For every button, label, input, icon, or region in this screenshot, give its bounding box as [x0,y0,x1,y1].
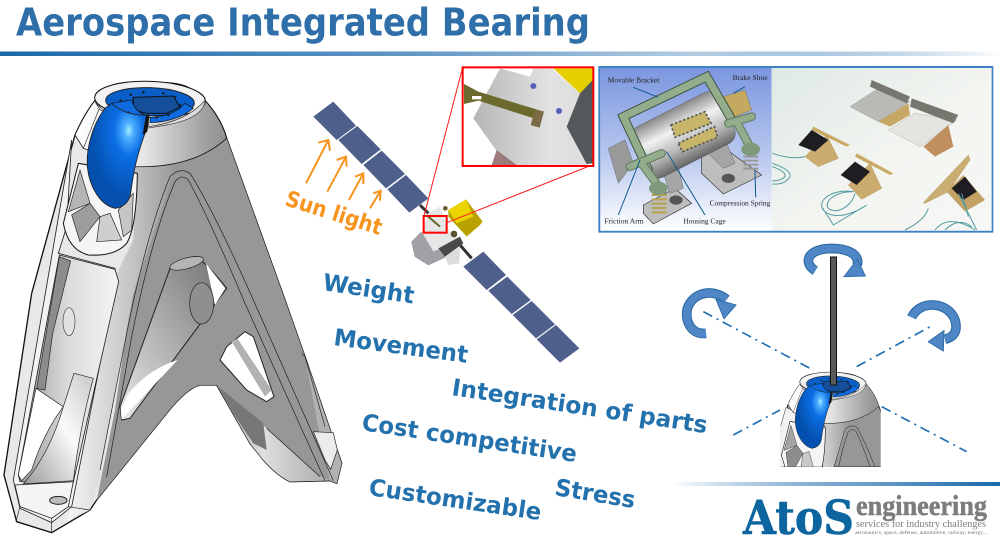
Atos logo [742,491,988,543]
Atos logo: aeronautics, space, defense, automotive, railway, energy... [855,529,988,536]
axis dash lines [703,312,967,452]
inset close-up [463,67,593,166]
lower left hollow [18,255,119,485]
hardware photograph [772,68,992,231]
solar panel lower [463,252,579,363]
left strut frame [13,140,117,523]
solar panel upper [313,102,428,213]
keyword: Stress: Stress [553,473,637,514]
centre window [120,257,227,420]
satellite body [412,199,483,265]
mechanism diagram: Brake Shoe [733,73,768,82]
title: Aerospace Integrated Bearing [16,0,590,44]
sun light label: Sun light [282,187,385,241]
red locator square [424,216,447,233]
sun arrows [306,140,381,208]
keyword: Customizable: Customizable [367,473,543,526]
zoom lines [424,67,589,223]
rotation arrow left [687,293,736,333]
rib lines [100,171,333,481]
photo panel [599,67,992,232]
mechanism diagram: Housing Cage [683,216,726,225]
dome with blue bearing ball [75,79,227,208]
title rule [0,52,1000,56]
rotation arrow top [808,248,865,277]
Atos logo: engineering [856,491,987,522]
mechanism diagram: Compression Spring [710,199,771,208]
mechanism diagram: Movable Bracket [608,75,659,84]
mechanism diagram: Friction Arm [604,216,644,225]
right window [220,332,274,402]
footer rule [672,482,1000,486]
satellite with sun light arrows [306,67,593,363]
upper left opening with fins [63,163,137,255]
large bearing part [4,79,342,533]
mini bearing [780,372,881,467]
keyword: Weight: Weight [321,268,416,310]
keyword: Cost competitive: Cost competitive [360,408,579,468]
rotation diagram [687,248,967,452]
keyword: Integration of parts: Integration of parts [450,373,709,439]
mechanism diagram [600,68,772,231]
Atos logo: services for industry challenges [856,518,986,530]
vertical rod [830,257,836,385]
keyword: Movement: Movement [332,323,470,369]
rotation arrow right [912,305,956,351]
